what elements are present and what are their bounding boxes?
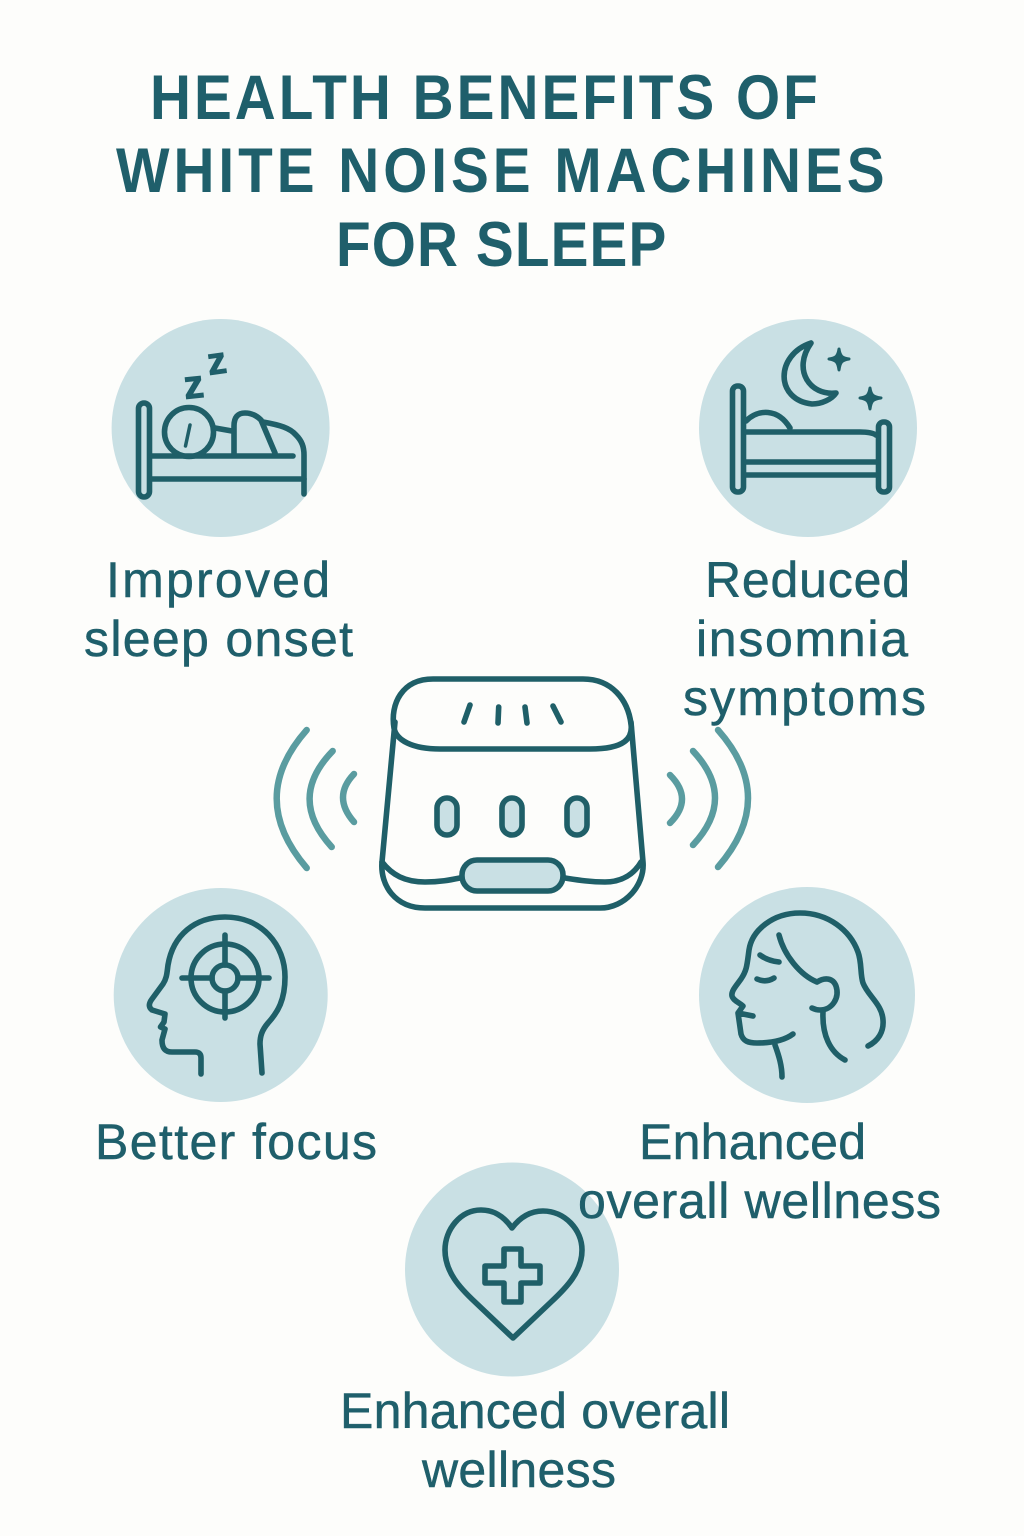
title (116, 62, 885, 280)
icon: bed with moon and stars (699, 319, 917, 537)
title: FOR SLEEP (336, 209, 666, 280)
label: overall wellness overlapping circle: overall wellness (578, 1173, 941, 1229)
panel: improved sleep onset (84, 319, 353, 667)
label: enhanced overall wellness, bottom: Enhanced overall (340, 1383, 730, 1439)
icon: sleeping person in bed: z (204, 340, 229, 384)
label: improved sleep onset: Improved (106, 552, 330, 608)
label: improved sleep onset: sleep onset (84, 611, 353, 667)
icon: woman profile (699, 887, 915, 1103)
icon: sleeping person in bed: z (181, 362, 206, 408)
icon: head with target (114, 888, 328, 1102)
icon: sleeping person in bed (112, 319, 330, 537)
panel: enhanced overall wellness, right (639, 887, 915, 1170)
label: enhanced overall wellness, right: Enhanced (639, 1114, 866, 1170)
label: reduced insomnia symptoms (683, 552, 926, 726)
label: improved sleep onset (84, 552, 353, 667)
panel: better focus (95, 888, 377, 1170)
icon: right sound waves (670, 730, 748, 867)
label: reduced insomnia symptoms: insomnia (696, 611, 908, 667)
icon: machine body (382, 679, 643, 908)
label: reduced insomnia symptoms: symptoms (683, 670, 926, 726)
label: better focus: Better focus (95, 1114, 377, 1170)
label: reduced insomnia symptoms: Reduced (705, 552, 910, 608)
illustration: white noise machine (277, 679, 748, 908)
title: HEALTH BENEFITS OF (150, 62, 818, 133)
icon: left sound waves (277, 730, 354, 868)
panel: enhanced overall wellness, bottom (340, 1162, 730, 1498)
label: enhanced overall wellness, bottom: wellness (421, 1442, 616, 1498)
title: WHITE NOISE MACHINES (116, 135, 885, 206)
icon: heart with cross (405, 1162, 619, 1376)
label: enhanced overall wellness, bottom (340, 1383, 730, 1498)
panel: reduced insomnia symptoms (683, 319, 926, 726)
